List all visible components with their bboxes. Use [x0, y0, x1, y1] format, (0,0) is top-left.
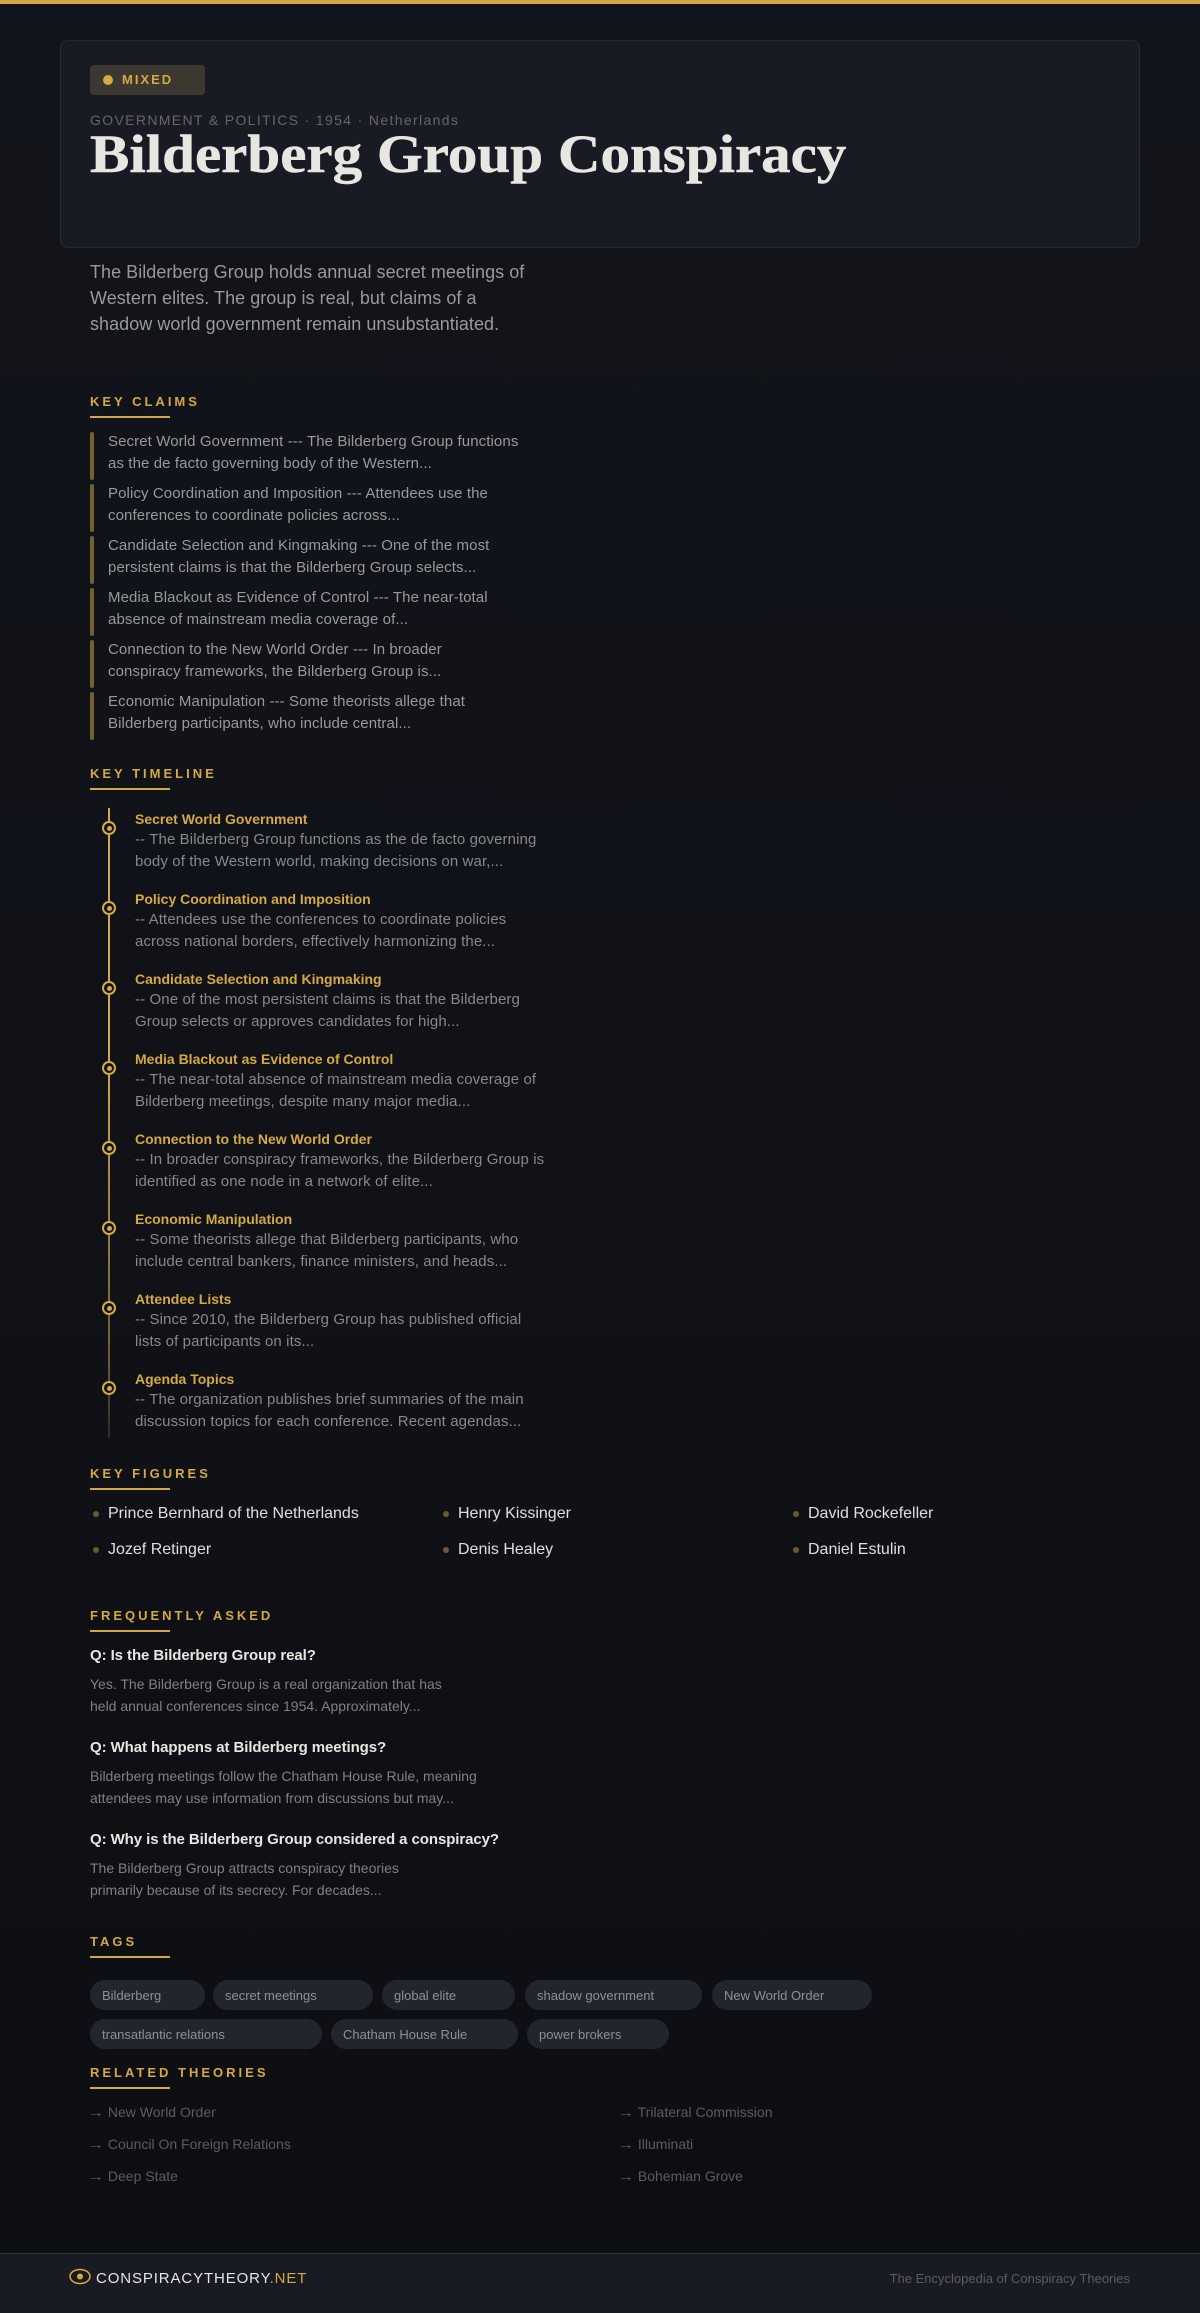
answer 2: Bilderberg meetings follow the Chatham House Rule, meaning [90, 1768, 477, 1784]
timeline item 3: -- One of the most persistent claims is that the Bilderberg [135, 991, 520, 1008]
question 3: Q: Why is the Bilderberg Group considered a conspiracy? [90, 1831, 499, 1848]
figure: Prince Bernhard: Prince Bernhard of the Netherlands [108, 1505, 359, 1522]
timeline item 6 [102, 1211, 518, 1270]
claim 5: conspiracy frameworks, the Bilderberg Group is... [108, 663, 441, 680]
summary text: The Bilderberg Group holds annual secret meetings of [90, 262, 524, 282]
category meta line: GOVERNMENT & POLITICS · 1954 · Netherlands [90, 112, 459, 128]
panel: frequently asked [90, 1608, 499, 1898]
answer 2 [90, 1768, 477, 1806]
tag: global elite [394, 1988, 456, 2003]
answer 1: Yes. The Bilderberg Group is a real organization that has [90, 1676, 442, 1692]
panel: tags [90, 1934, 872, 2049]
tag [525, 1980, 702, 2010]
timeline item 1: -- The Bilderberg Group functions as the de facto governing [135, 831, 536, 848]
panel: key claims [90, 394, 518, 740]
heading: key claims: KEY CLAIMS [90, 394, 200, 409]
claim 5 [90, 640, 442, 688]
answer 3 [90, 1860, 399, 1898]
logo wordmark: CONSPIRACYTHEORY.NET [96, 2270, 307, 2287]
tag [90, 2019, 322, 2049]
timeline item 8: discussion topics for each conference. Recent agendas... [135, 1413, 521, 1430]
related link: → [617, 2168, 634, 2184]
timeline item 2: across national borders, effectively harmonizing the... [135, 933, 495, 950]
tag: Chatham House Rule [343, 2027, 467, 2042]
timeline item 6: include central bankers, finance ministers, and heads... [135, 1253, 507, 1270]
timeline item 3 [102, 971, 520, 1030]
timeline item 2: -- Attendees use the conferences to coordinate policies [135, 911, 506, 928]
heading: frequently asked: FREQUENTLY ASKED [90, 1608, 273, 1623]
timeline item 5 [102, 1131, 544, 1190]
heading: tags: TAGS [90, 1934, 137, 1949]
answer 3: primarily because of its secrecy. For decades... [90, 1882, 382, 1898]
timeline item 5: Connection to the New World Order [135, 1131, 372, 1147]
tag: transatlantic relations [102, 2027, 225, 2042]
claim 2: Policy Coordination and Imposition --- Attendees use the [108, 485, 488, 502]
claim 6 [90, 692, 465, 740]
related link: Trilateral Commission [638, 2104, 772, 2120]
timeline item 4: -- The near-total absence of mainstream media coverage of [135, 1071, 536, 1088]
claim 3: persistent claims is that the Bilderberg Group selects... [108, 559, 476, 576]
tag [331, 2019, 518, 2049]
top accent bar [0, 0, 1200, 4]
related link: → [87, 2168, 104, 2184]
tag [382, 1980, 515, 2010]
tag: New World Order [724, 1988, 824, 2003]
panel: key figures [90, 1466, 934, 1558]
question 2: Q: What happens at Bilderberg meetings? [90, 1739, 386, 1756]
icon: badge dot [103, 75, 113, 85]
timeline item 3: Candidate Selection and Kingmaking [135, 971, 382, 987]
claim 2 [90, 484, 488, 532]
footer [0, 2253, 1200, 2313]
panel: header card [60, 40, 1140, 248]
answer 1: held annual conferences since 1954. Approximately... [90, 1698, 421, 1714]
footer tagline: The Encyclopedia of Conspiracy Theories [890, 2271, 1130, 2286]
badge label: MIXED [122, 72, 173, 87]
claim 4 [90, 588, 488, 636]
timeline item 2 [102, 891, 506, 950]
figure: David Rockefeller: David Rockefeller [808, 1505, 933, 1522]
title: Bilderberg Group Conspiracy [90, 124, 846, 184]
related link: → [617, 2104, 634, 2120]
timeline item 1 [102, 811, 536, 870]
summary text: Western elites. The group is real, but claims of a [90, 288, 477, 308]
timeline item 8 [102, 1371, 524, 1430]
timeline item 6: -- Some theorists allege that Bilderberg participants, who [135, 1231, 518, 1248]
figure: Daniel Estulin: Daniel Estulin [808, 1541, 906, 1558]
heading: related theories: RELATED THEORIES [90, 2065, 268, 2080]
claim 5: Connection to the New World Order --- In broader [108, 641, 442, 658]
answer 2: attendees may use information from discussions but may... [90, 1790, 454, 1806]
claim 6: Economic Manipulation --- Some theorists allege that [108, 693, 465, 710]
claim 1: Secret World Government --- The Bilderberg Group functions [108, 433, 518, 450]
summary text: shadow world government remain unsubstantiated. [90, 314, 499, 334]
question 1: Q: Is the Bilderberg Group real? [90, 1647, 316, 1664]
summary text [90, 262, 524, 334]
timeline item 1: body of the Western world, making decisions on war,... [135, 853, 503, 870]
answer 1 [90, 1676, 442, 1714]
claim 4: absence of mainstream media coverage of... [108, 611, 408, 628]
timeline item 4 [102, 1051, 536, 1110]
claim 4: Media Blackout as Evidence of Control --- The near-total [108, 589, 488, 606]
tag: power brokers [539, 2027, 621, 2042]
related link: → [87, 2104, 104, 2120]
claim 2: conferences to coordinate policies across... [108, 507, 400, 524]
related link: Bohemian Grove [638, 2168, 743, 2184]
claim 3: Candidate Selection and Kingmaking --- One of the most [108, 537, 489, 554]
answer 3: The Bilderberg Group attracts conspiracy theories [90, 1860, 399, 1876]
timeline spine [108, 808, 110, 1438]
tag: secret meetings [225, 1988, 317, 2003]
panel: key timeline [90, 766, 544, 1438]
timeline item 3: Group selects or approves candidates for high... [135, 1013, 460, 1030]
timeline item 4: Media Blackout as Evidence of Control [135, 1051, 393, 1067]
tag [712, 1980, 872, 2010]
claim 1 [90, 432, 518, 480]
icon: eye logo [69, 2268, 91, 2284]
timeline item 8: Agenda Topics [135, 1371, 234, 1387]
claim 1: as the de facto governing body of the Western... [108, 455, 432, 472]
badge: mixed verdict [90, 65, 205, 95]
tag [527, 2019, 669, 2049]
related link: New World Order [108, 2104, 216, 2120]
related link: → [617, 2136, 634, 2152]
related link: Illuminati [638, 2136, 693, 2152]
related link: Deep State [108, 2168, 178, 2184]
timeline item 6: Economic Manipulation [135, 1211, 292, 1227]
tag: Bilderberg [102, 1988, 161, 2003]
heading: key figures: KEY FIGURES [90, 1466, 211, 1481]
timeline item 4: Bilderberg meetings, despite many major media... [135, 1093, 470, 1110]
panel: related theories [87, 2065, 772, 2184]
figure: Henry Kissinger: Henry Kissinger [458, 1505, 571, 1522]
timeline item 1: Secret World Government [135, 811, 307, 827]
tag: shadow government [537, 1988, 654, 2003]
figure: Jozef Retinger: Jozef Retinger [108, 1541, 211, 1558]
timeline item 5: identified as one node in a network of elite... [135, 1173, 433, 1190]
tag [213, 1980, 373, 2010]
figure: Denis Healey: Denis Healey [458, 1541, 553, 1558]
claim 6: Bilderberg participants, who include central... [108, 715, 411, 732]
timeline item 5: -- In broader conspiracy frameworks, the Bilderberg Group is [135, 1151, 544, 1168]
claim 3 [90, 536, 490, 584]
timeline item 7 [102, 1291, 521, 1350]
timeline item 7: -- Since 2010, the Bilderberg Group has published official [135, 1311, 521, 1328]
related link: Council On Foreign Relations [108, 2136, 291, 2152]
heading: key timeline: KEY TIMELINE [90, 766, 217, 781]
timeline item 2: Policy Coordination and Imposition [135, 891, 371, 907]
timeline item 7: Attendee Lists [135, 1291, 231, 1307]
timeline item 8: -- The organization publishes brief summaries of the main [135, 1391, 524, 1408]
tag [90, 1980, 205, 2010]
related link: → [87, 2136, 104, 2152]
timeline item 7: lists of participants on its... [135, 1333, 314, 1350]
